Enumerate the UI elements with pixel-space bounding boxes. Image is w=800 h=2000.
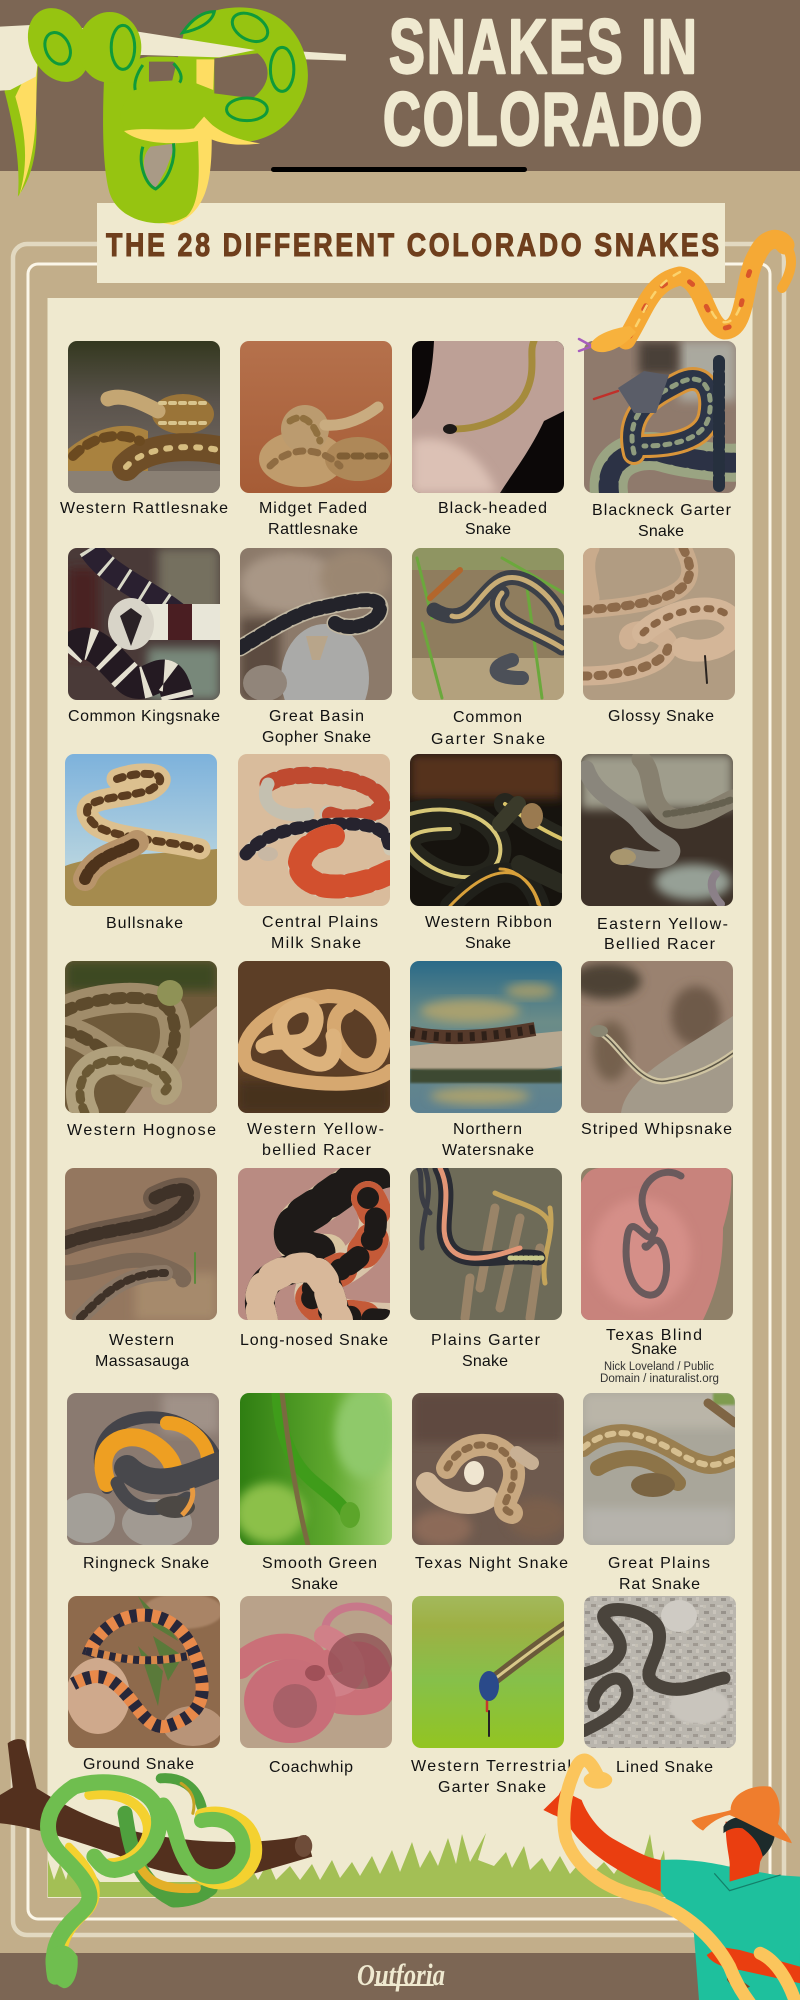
photo: Lined Snake bbox=[584, 1596, 736, 1748]
banner heading: THE 28 DIFFERENT COLORADO SNAKES bbox=[106, 228, 719, 264]
label bbox=[247, 1121, 384, 1159]
held snake head bbox=[584, 1771, 612, 1789]
photo credit: Nick Loveland / Public bbox=[604, 1361, 714, 1373]
shirt bbox=[661, 1860, 800, 2000]
label: Snake bbox=[462, 1353, 508, 1370]
photo: Striped Whipsnake bbox=[571, 961, 736, 1113]
photo: Great Plains Rat Snake bbox=[583, 1393, 735, 1545]
illustration: orange snake (top right) bbox=[579, 239, 791, 352]
label: Western Yellow- bbox=[247, 1121, 384, 1138]
card: Plains Garter Snake bbox=[410, 1168, 562, 1370]
photo: Blackneck Garter Snake bbox=[584, 341, 744, 493]
label bbox=[425, 914, 552, 952]
grass bbox=[48, 1833, 668, 1897]
label: Snake bbox=[631, 1341, 677, 1358]
label: Black-headed bbox=[438, 500, 547, 517]
photo: Texas Blind Snake bbox=[581, 1168, 733, 1320]
label: Smooth Green bbox=[262, 1555, 377, 1572]
label: Blackneck Garter bbox=[592, 502, 732, 519]
photo: Long-nosed Snake bbox=[238, 1168, 390, 1320]
label: Massasauga bbox=[95, 1353, 189, 1370]
label: Garter Snake bbox=[431, 731, 545, 748]
label: Garter Snake bbox=[438, 1779, 546, 1796]
icon: green snake head bbox=[46, 1945, 78, 1988]
label: Striped Whipsnake bbox=[581, 1121, 732, 1138]
card: Black-headed Snake bbox=[412, 341, 564, 538]
label: Bellied Racer bbox=[604, 936, 716, 953]
inner frame bbox=[28, 264, 770, 1919]
card: Glossy Snake bbox=[583, 548, 735, 725]
label: Snake bbox=[465, 935, 511, 952]
photo credit: Domain / inaturalist.org bbox=[600, 1373, 719, 1385]
label: Western Hognose bbox=[67, 1122, 216, 1139]
card: Great Plains Rat Snake bbox=[583, 1393, 735, 1593]
label bbox=[262, 708, 371, 746]
photo: Eastern Yellow-Bellied Racer bbox=[581, 754, 733, 906]
label: Rat Snake bbox=[619, 1576, 700, 1593]
label: Snake bbox=[638, 523, 684, 540]
label bbox=[95, 1332, 189, 1370]
photo: Western Terrestrial Garter Snake bbox=[412, 1596, 567, 1748]
main panel bbox=[48, 298, 752, 1898]
icon: orange snake head bbox=[579, 326, 636, 352]
photo: Western Yellow-bellied Racer bbox=[238, 961, 390, 1113]
card: Striped Whipsnake bbox=[571, 961, 736, 1138]
card: Common Garter Snake bbox=[412, 548, 564, 748]
card: Central Plains Milk Snake bbox=[238, 754, 390, 952]
label: Central Plains bbox=[262, 914, 378, 931]
label: Plains Garter bbox=[431, 1332, 541, 1349]
card: Midget Faded Rattlesnake bbox=[240, 341, 392, 538]
label: Northern bbox=[453, 1121, 522, 1138]
label: Snake bbox=[465, 521, 511, 538]
title bbox=[383, 5, 702, 161]
hat bbox=[691, 1786, 792, 1843]
photo: Great Basin Gopher Snake bbox=[240, 548, 392, 700]
face and neck bbox=[726, 1822, 770, 1882]
photo: Common Kingsnake bbox=[68, 548, 220, 700]
logo: Outforia: Outforia bbox=[357, 1957, 445, 1992]
photo: Western Rattlesnake bbox=[68, 341, 223, 493]
card: Bullsnake bbox=[65, 754, 217, 932]
title: SNAKES IN bbox=[389, 5, 697, 90]
label: Great Plains bbox=[608, 1555, 710, 1572]
label: Ground Snake bbox=[83, 1756, 194, 1773]
photo: Texas Night Snake bbox=[412, 1393, 567, 1546]
card: Long-nosed Snake bbox=[238, 1168, 390, 1349]
label bbox=[259, 500, 367, 538]
divider bar bbox=[271, 167, 527, 172]
label: Western Terrestrial bbox=[411, 1758, 571, 1775]
label: Ringneck Snake bbox=[83, 1555, 209, 1572]
label: Long-nosed Snake bbox=[240, 1332, 388, 1349]
photo: Plains Garter Snake bbox=[410, 1168, 562, 1320]
illustration: branch with green snake (bottom left) bbox=[0, 1739, 312, 1988]
card: Texas Night Snake bbox=[412, 1393, 568, 1572]
label: Milk Snake bbox=[271, 935, 361, 952]
label: Gopher Snake bbox=[262, 729, 371, 746]
card: Western Terrestrial Garter Snake bbox=[411, 1596, 571, 1796]
label bbox=[431, 709, 545, 748]
label: Lined Snake bbox=[616, 1759, 713, 1776]
label: Western bbox=[109, 1332, 174, 1349]
label bbox=[438, 500, 547, 538]
photo: Midget Faded Rattlesnake bbox=[240, 341, 392, 493]
forearm and hand bbox=[707, 1947, 800, 1983]
card: Western Yellow-bellied Racer bbox=[238, 961, 390, 1159]
label bbox=[597, 916, 728, 953]
card: Ringneck Snake bbox=[59, 1393, 219, 1572]
label: Watersnake bbox=[442, 1142, 534, 1159]
pants strap bbox=[727, 1970, 750, 1993]
label: Snake bbox=[291, 1576, 338, 1593]
label bbox=[411, 1758, 571, 1796]
header band bbox=[0, 0, 800, 171]
banner bbox=[97, 203, 725, 283]
hair bbox=[723, 1817, 775, 1857]
card: Lined Snake bbox=[584, 1596, 736, 1776]
label: Eastern Yellow- bbox=[597, 916, 728, 933]
card: Western Massasauga bbox=[65, 1168, 217, 1370]
photo: Ringneck Snake bbox=[59, 1393, 219, 1547]
card: Northern Watersnake bbox=[410, 961, 562, 1159]
card: Western Ribbon Snake bbox=[408, 754, 562, 952]
label bbox=[262, 914, 378, 952]
card: Texas Blind Snake bbox=[581, 1168, 733, 1358]
label: Western Rattlesnake bbox=[60, 500, 228, 517]
card: Blackneck Garter Snake bbox=[584, 341, 744, 540]
label: Rattlesnake bbox=[268, 521, 358, 538]
label bbox=[262, 1555, 377, 1593]
card: Coachwhip bbox=[240, 1596, 392, 1776]
label: bellied Racer bbox=[262, 1142, 372, 1159]
label bbox=[592, 502, 732, 540]
footer band bbox=[0, 1953, 800, 2000]
shirt collar bbox=[714, 1873, 781, 1891]
photo: Northern Watersnake bbox=[410, 961, 562, 1113]
label: Texas Blind bbox=[606, 1327, 702, 1344]
photo: Smooth Green Snake bbox=[235, 1388, 395, 1545]
label bbox=[431, 1332, 541, 1370]
card: Eastern Yellow-Bellied Racer bbox=[581, 754, 733, 953]
held snake bbox=[564, 1760, 796, 2000]
photo: Bullsnake bbox=[65, 754, 217, 906]
card: Great Basin Gopher Snake bbox=[240, 548, 392, 746]
illustration: green snake on branch (top) bbox=[0, 5, 346, 225]
card: Ground Snake bbox=[66, 1593, 223, 1773]
label: Western Ribbon bbox=[425, 914, 552, 931]
title: COLORADO bbox=[383, 77, 702, 161]
card: Common Kingsnake bbox=[68, 548, 220, 725]
photo: Glossy Snake bbox=[583, 548, 735, 700]
photo: Western Hognose bbox=[65, 961, 217, 1113]
photo: Central Plains Milk Snake bbox=[238, 754, 390, 906]
label bbox=[606, 1327, 702, 1358]
card: Western Rattlesnake bbox=[60, 341, 228, 517]
arm bbox=[543, 1790, 661, 1892]
label: Great Basin bbox=[269, 708, 364, 725]
card: Smooth Green Snake bbox=[235, 1388, 395, 1593]
photo: Black-headed Snake bbox=[412, 341, 564, 493]
photo: Coachwhip bbox=[240, 1596, 392, 1748]
label bbox=[608, 1555, 710, 1593]
photo: Ground Snake bbox=[66, 1593, 223, 1748]
label: Common Kingsnake bbox=[68, 708, 220, 725]
label: Midget Faded bbox=[259, 500, 367, 517]
photo: Common Garter Snake bbox=[412, 548, 564, 700]
photo: Western Massasauga bbox=[65, 1168, 217, 1320]
label: Common bbox=[453, 709, 522, 726]
label: Glossy Snake bbox=[608, 708, 714, 725]
label bbox=[442, 1121, 534, 1159]
card: Western Hognose bbox=[65, 961, 217, 1139]
label: Bullsnake bbox=[106, 915, 183, 932]
label: Texas Night Snake bbox=[415, 1555, 568, 1572]
photo credit bbox=[600, 1361, 719, 1385]
photo: Western Ribbon Snake bbox=[408, 754, 562, 906]
label: Coachwhip bbox=[269, 1759, 353, 1776]
illustration: person holding snake (bottom right) bbox=[543, 1760, 800, 2000]
